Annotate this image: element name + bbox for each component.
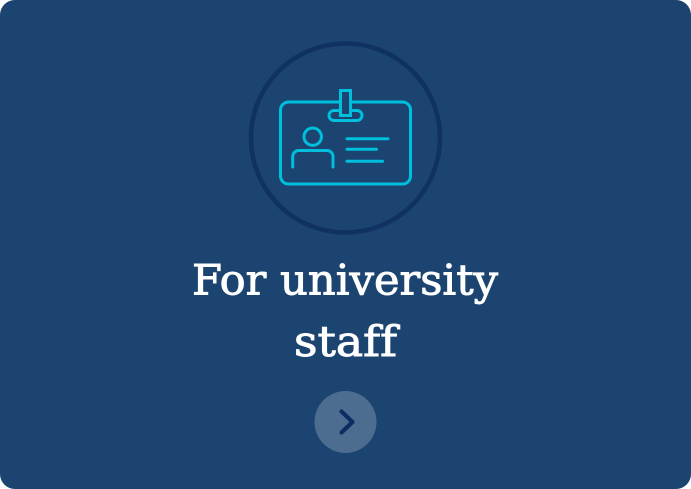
title line 1: For university bbox=[192, 255, 498, 304]
title bbox=[192, 255, 498, 366]
badge clip bbox=[340, 90, 350, 116]
person body bbox=[293, 150, 333, 167]
title line 2: staff bbox=[294, 317, 401, 366]
icon: chevron bbox=[342, 412, 352, 432]
text lines bbox=[347, 139, 388, 161]
icon: ID badge in circle bbox=[251, 44, 440, 232]
icon ring bbox=[251, 44, 440, 232]
button: next arrow bbox=[314, 391, 376, 453]
badge card bbox=[280, 102, 410, 184]
button circle bbox=[314, 391, 376, 453]
person head bbox=[304, 128, 321, 145]
badge slot bbox=[329, 110, 362, 120]
